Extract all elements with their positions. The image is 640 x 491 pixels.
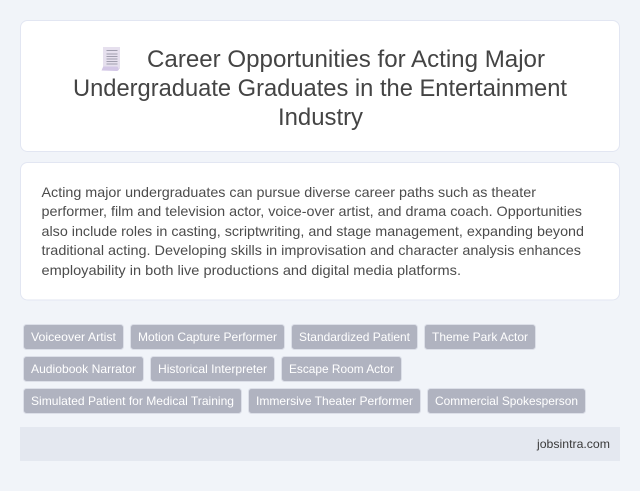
- text block: description paragraph: traditional acting. Developing skills in improvisation and character analysis enhances: [42, 242, 581, 258]
- footer bar: [20, 427, 620, 461]
- heading: title: Undergraduate Graduates in the Entertainment: [73, 75, 567, 102]
- tag: Escape Room Actor: Escape Room Actor: [289, 362, 394, 376]
- tag: Theme Park Actor: Theme Park Actor: [432, 330, 528, 344]
- tag: Escape Room Actor: [282, 356, 402, 382]
- panel: title card: [20, 20, 620, 152]
- text block: description paragraph: Acting major undergraduates can pursue diverse career paths such as theater: [42, 184, 536, 200]
- tag: Commercial Spokesperson: [428, 388, 586, 414]
- tag: Historical Interpreter: Historical Interpreter: [158, 362, 267, 376]
- text block: description paragraph: employability in both live productions and digital media platforms.: [42, 262, 461, 278]
- tag: Immersive Theater Performer: Immersive Theater Performer: [256, 394, 413, 408]
- tag: Audiobook Narrator: [24, 356, 144, 382]
- tag: Theme Park Actor: [424, 324, 536, 350]
- heading: title: Career Opportunities for Acting Major: [147, 46, 545, 73]
- footer source text: jobsintra.com: [536, 437, 610, 451]
- icon: scroll document: [102, 47, 120, 71]
- heading: title: [73, 46, 567, 131]
- tag: Standardized Patient: [292, 324, 418, 350]
- tag: Commercial Spokesperson: Commercial Spokesperson: [435, 394, 578, 408]
- tag: Audiobook Narrator: Audiobook Narrator: [31, 362, 136, 376]
- panel: description: [20, 162, 620, 300]
- text block: description paragraph: also include roles in casting, scriptwriting, and stage management, expanding beyond: [42, 223, 584, 239]
- tag: Motion Capture Performer: Motion Capture Performer: [138, 330, 277, 344]
- tag: Standardized Patient: Standardized Patient: [299, 330, 411, 344]
- tag: Immersive Theater Performer: [248, 388, 420, 414]
- tag: Motion Capture Performer: [130, 324, 284, 350]
- heading: title: Industry: [278, 104, 363, 131]
- tag: Simulated Patient for Medical Training: [24, 388, 242, 414]
- tag: Voiceover Artist: [24, 324, 124, 350]
- text block: description paragraph: [42, 184, 584, 278]
- tag: Voiceover Artist: Voiceover Artist: [31, 330, 117, 344]
- text block: description paragraph: performer, film and television actor, voice-over artist, and drama coach. Opportunities: [42, 203, 582, 219]
- tag: Simulated Patient for Medical Training: Simulated Patient for Medical Training: [31, 394, 234, 408]
- tag list: career roles: [24, 324, 586, 414]
- tag: Historical Interpreter: [150, 356, 274, 382]
